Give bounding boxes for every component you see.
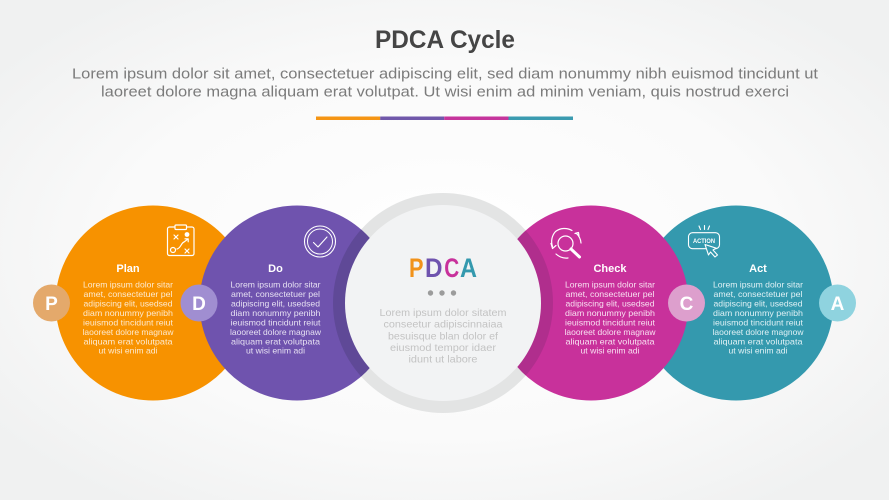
plan text: aliquam erat volutpata (84, 336, 173, 346)
plan text (82, 280, 174, 356)
center PDCA wordmark: D (425, 253, 442, 283)
badge: P: P (45, 294, 58, 315)
subtitle (72, 66, 819, 100)
icon: check circle (304, 226, 336, 257)
check text: laooreet dolore magnaw (564, 327, 656, 337)
do text: laooreet dolore magnaw (230, 327, 322, 337)
do text: ieuismod tincidunt reiut (230, 317, 321, 327)
check text: aliquam erat volutpata (566, 336, 655, 346)
check heading: Check (593, 263, 627, 275)
do text: amet, consectetuer pel (231, 289, 320, 299)
plan text: Lorem ipsum dolor sitar (83, 280, 173, 290)
badge: A (819, 284, 856, 322)
badge: D: D (192, 294, 206, 315)
act text: diam nonummy penibh (713, 308, 803, 318)
act text: aliquam erat volutpata (714, 336, 803, 346)
act text: laooreet dolore magnow (712, 327, 804, 337)
do text: adipiscing elit, usedsed (231, 298, 320, 308)
center circle (345, 205, 541, 401)
plan text: diam nonummy penibh (83, 308, 173, 318)
do text: diam nonummy penibh (230, 308, 321, 318)
icon: action button: ACTION (693, 238, 715, 245)
infographic canvas (33, 30, 856, 413)
badge: C: C (680, 294, 694, 315)
act text: amet, consectetuer pel (714, 289, 803, 299)
plan text: ieuismod tincidunt reiut (83, 317, 174, 327)
panel: act (638, 206, 834, 400)
plan heading: Plan (116, 263, 140, 275)
act text: ut wisi enim adi (728, 346, 788, 356)
colored divider (316, 116, 573, 120)
check text: adipiscing elit, usedsed (566, 298, 655, 308)
act text: ieuismod tincidunt reiut (713, 317, 804, 327)
title: PDCA Cycle (375, 26, 515, 54)
subtitle: laoreet dolore magna aliquam erat volutpat. Ut wisi enim ad minim veniam, quis nostrud exerci (101, 84, 789, 100)
do text: aliquam erat volutpata (231, 336, 320, 346)
center text: idunt ut labore (408, 354, 478, 366)
center PDCA wordmark (409, 253, 477, 283)
icon: clipboard strategy (168, 225, 194, 256)
outer gray ring (333, 193, 553, 413)
badge: C (668, 284, 705, 322)
check text: amet, consectetuer pel (566, 289, 655, 299)
panel: check (517, 206, 687, 400)
check text: Lorem ipsum dolor sitar (565, 280, 655, 290)
center dots (428, 290, 456, 296)
center text: Lorem ipsum dolor sitatem (380, 307, 507, 319)
plan text: amet, consectetuer pel (84, 289, 173, 299)
check text: ieuismod tincidunt reiut (565, 317, 656, 327)
badge: P (33, 284, 70, 322)
do text (230, 280, 322, 356)
check text: diam nonummy penibh (565, 308, 655, 318)
center text: eiusmod tempor idaer (390, 342, 497, 354)
do text: ut wisi enim adi (246, 346, 305, 356)
plan text: laooreet dolore magnaw (82, 327, 174, 337)
subtitle: Lorem ipsum dolor sit amet, consectetuer adipiscing elit, sed diam nonummy nibh euismod tincidunt ut (72, 66, 819, 82)
check text (564, 280, 656, 356)
center PDCA wordmark: C (444, 253, 459, 283)
panel: do (201, 206, 370, 400)
badge: A: A (831, 294, 845, 315)
act text (712, 280, 804, 356)
center PDCA wordmark: P (409, 253, 424, 283)
center text: besuisque blan dolor ef (388, 330, 498, 342)
plan text: ut wisi enim adi (98, 346, 158, 356)
center PDCA wordmark: A (460, 253, 477, 283)
center text (380, 307, 507, 366)
center text: conseetur adipiscinnaiaa (384, 319, 503, 331)
check text: ut wisi enim adi (580, 346, 640, 356)
plan text: adipiscing elit, usedsed (84, 298, 173, 308)
act text: adipiscing elit, usedsed (714, 298, 803, 308)
do heading: Do (268, 263, 283, 275)
icon: action button (688, 226, 720, 257)
panel: plan (56, 206, 250, 400)
do text: Lorem ipsum dolor sitar (230, 280, 321, 290)
act heading: Act (749, 263, 767, 275)
act text: Lorem ipsum dolor sitar (713, 280, 803, 290)
badge: D (180, 284, 218, 322)
icon: search cycle (551, 228, 581, 258)
